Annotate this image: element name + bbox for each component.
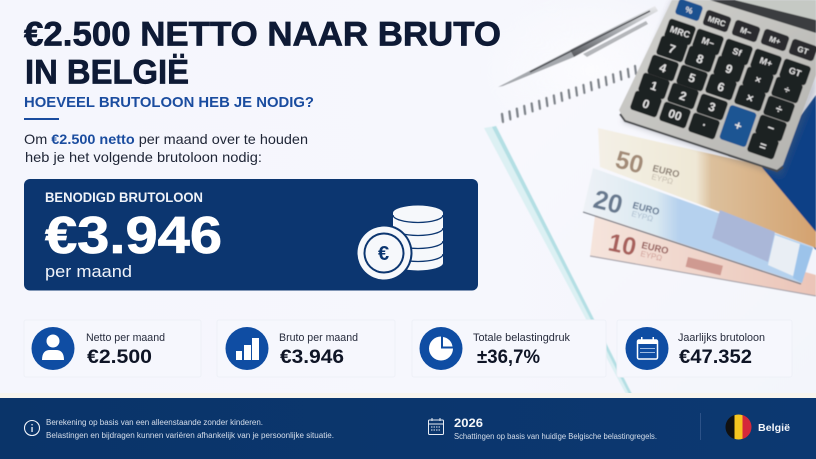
banknote 50 euro: ΕΥΡΩ: [651, 172, 674, 186]
icon: person: [32, 327, 74, 370]
calculator keys: MRC: [669, 24, 692, 40]
banknote 50 euro: 50: [613, 146, 646, 180]
calculator keys: ·: [700, 118, 708, 132]
panel label: BENODIGD BRUTOLOON: [45, 190, 203, 205]
soft light behind pen: [480, 0, 700, 150]
intro text: [24, 131, 308, 165]
panel unit: per maand: [45, 262, 132, 281]
footer note: Belastingen en bijdragen kunnen variëren afhankelijk van je persoonlijke situatie.: [46, 431, 334, 440]
calculator keys: 9: [724, 61, 735, 77]
calculator body: [619, 0, 816, 170]
calculator keys: M−: [739, 25, 753, 38]
calculator keys: 6: [716, 79, 727, 95]
divider: [700, 413, 701, 440]
value: €47.352: [679, 347, 752, 368]
calculator keys: ×: [744, 90, 756, 106]
intro text: Om €2.500 netto per maand over te houden: [24, 131, 308, 147]
label: Bruto per maand: [279, 332, 358, 344]
icon: calendar: [626, 327, 668, 370]
calculator keys: +: [732, 117, 745, 134]
footer strip highlight: [0, 393, 816, 398]
banknote 50 euro: [598, 128, 816, 248]
calculator keys: 8: [695, 51, 706, 67]
notebook cyan edge: [484, 126, 634, 398]
calculator keys: 5: [687, 70, 698, 86]
calculator keys: M−: [700, 35, 716, 49]
icon: info: [24, 420, 40, 436]
calculator keys: GT: [796, 44, 810, 57]
calculator keys: 00: [666, 106, 684, 124]
pen: [498, 6, 658, 87]
calculator keys: =: [757, 138, 769, 154]
icon: coin stack with euro coin: €: [378, 243, 389, 265]
dark blue folder: [744, 95, 816, 250]
calculator keys: 4: [658, 60, 669, 76]
subtitle underline: [24, 118, 59, 120]
calculator display: [710, 0, 816, 33]
calculator keys: GT: [787, 65, 803, 79]
footer note: Berekening op basis van een alleenstaande zonder kinderen.: [46, 418, 263, 427]
label: Totale belastingdruk: [473, 332, 570, 344]
notebook spiral binding: [502, 66, 636, 122]
banknote 10 euro: ΕΥΡΩ: [640, 249, 663, 263]
banknote 20 euro: EURO: [631, 200, 661, 218]
banknote 20 euro: 20: [591, 184, 626, 220]
intro text: heb je het volgende brutoloon nodig:: [25, 149, 262, 165]
calculator keys: −: [765, 120, 777, 136]
estimate note: Schattingen op basis van huidige Belgische belastingregels.: [454, 432, 657, 441]
title: [24, 16, 501, 92]
calculator keys: 3: [707, 99, 718, 115]
banknote 10 euro: [590, 215, 816, 296]
calculator keys: 2: [678, 88, 689, 104]
footer note: [46, 418, 334, 440]
calculator keys: %: [684, 4, 695, 16]
calculator keys: M+: [768, 34, 782, 47]
icon: bar chart: [226, 327, 268, 370]
panel: benodigd brutoloon: [24, 179, 478, 290]
calculator keys: 1: [649, 78, 660, 94]
banknote 20 euro: ΕΥΡΩ: [630, 209, 654, 224]
calculator keys: ÷: [782, 84, 792, 97]
calculator keys: ÷: [774, 101, 785, 117]
value: €2.500: [87, 347, 152, 368]
calculator keys: 0: [641, 96, 652, 112]
icon: pie chart: [420, 327, 462, 370]
value: €3.946: [280, 347, 344, 368]
banknote 20 euro: [583, 168, 813, 284]
subtitle: HOEVEEL BRUTOLOON HEB JE NODIG?: [24, 94, 314, 111]
panel: jaarlijks brutoloon: [617, 320, 792, 377]
icon: coin stack with euro coin: [356, 206, 443, 282]
icon: Belgian flag: [726, 414, 751, 440]
calculator keys: [630, 0, 816, 160]
banknote 50 euro: EURO: [651, 163, 681, 181]
title: €2.500 NETTO NAAR BRUTO: [24, 16, 501, 54]
year: 2026: [454, 418, 483, 430]
footer: [0, 398, 816, 459]
calculator keys: 7: [667, 41, 678, 57]
calculator keys: ×: [753, 74, 763, 87]
panel: totale belastingdruk: [412, 320, 606, 377]
label: Netto per maand: [86, 332, 165, 344]
title: IN BELGIË: [25, 54, 189, 92]
label: Jaarlijks brutoloon: [678, 332, 765, 344]
banknote 10 euro: 10: [606, 228, 639, 262]
photo: desk with notebook, pen, calculator and banknotes: [480, 0, 816, 398]
panel: bruto per maand: [217, 320, 395, 377]
calculator keys: M+: [758, 55, 774, 69]
notebook page: [497, 62, 816, 398]
icon: calendar small: [428, 418, 444, 434]
banknote 10 euro: EURO: [640, 240, 670, 257]
panel amount: €3.946: [45, 207, 222, 265]
calculator shadow: [622, 0, 816, 177]
value: ±36,7%: [477, 347, 540, 368]
panel: netto per maand: [24, 320, 201, 377]
country label: België: [758, 422, 790, 434]
calculator keys: MRC: [707, 14, 727, 29]
calculator lower edge: [620, 114, 783, 171]
calculator keys: Sf: [731, 46, 744, 59]
